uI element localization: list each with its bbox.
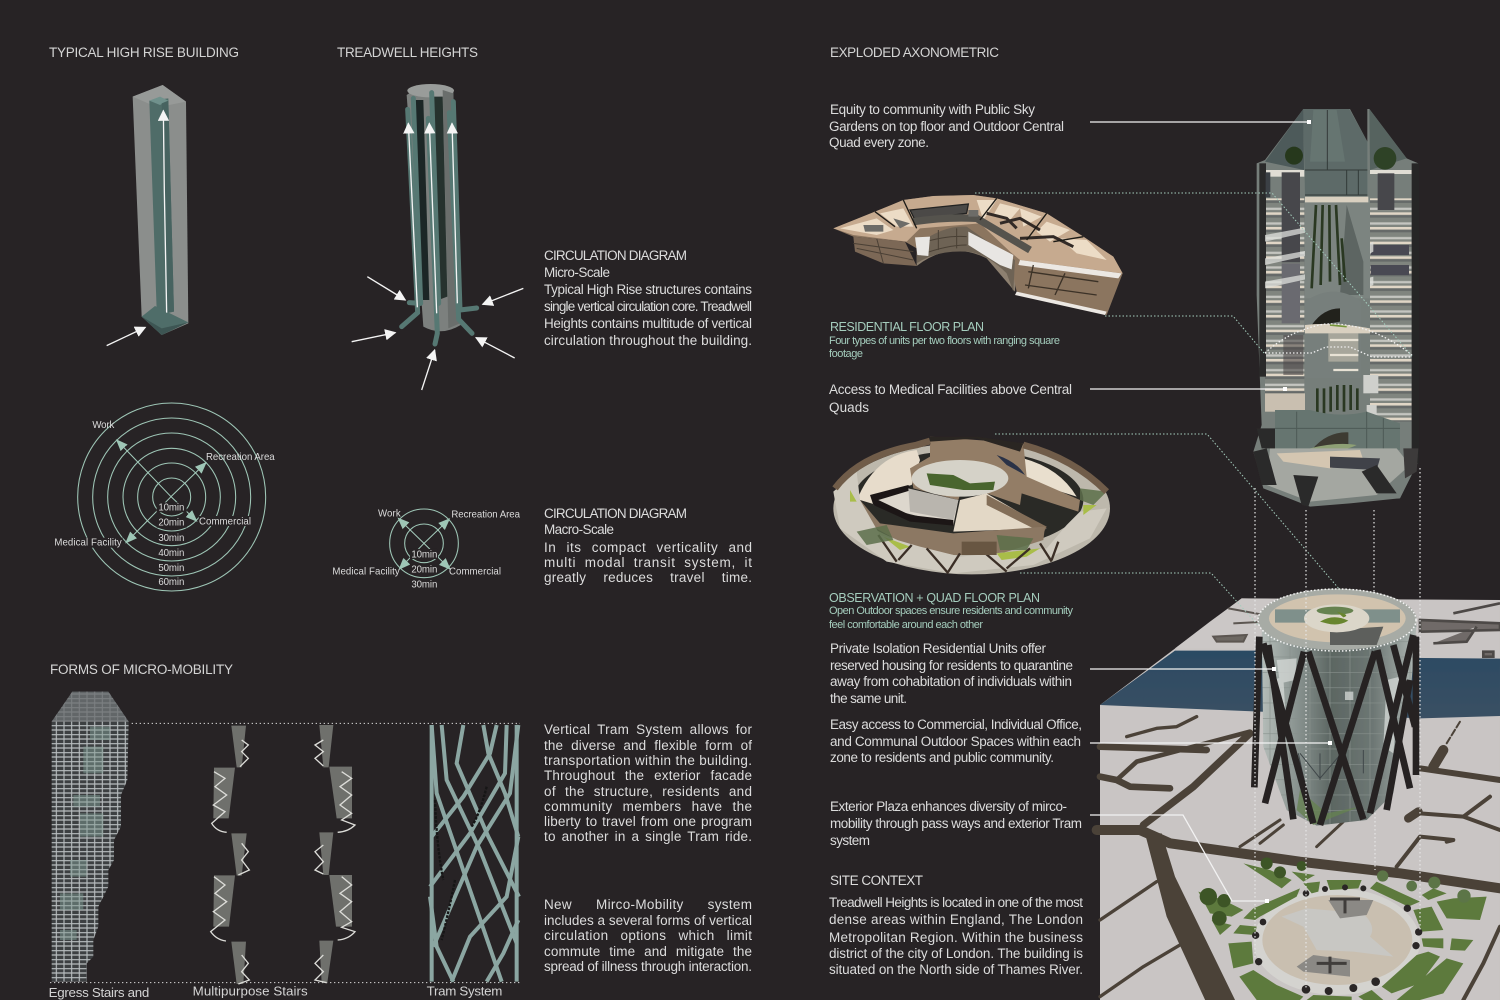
text: site context: situated on the North side of Thames River. — [829, 962, 1083, 977]
right residential floors — [1353, 163, 1419, 463]
roads — [1097, 717, 1500, 1000]
rings — [78, 403, 266, 591]
text block: vertical tram system: Throughout the exterior facade — [544, 768, 752, 783]
text: observation floor plan caption: OBSERVATION + QUAD FLOOR PLAN — [829, 591, 1040, 605]
atrium mid — [1305, 292, 1370, 378]
leader: exterior plaza — [1090, 815, 1269, 903]
labels: forms: Tram System — [427, 983, 502, 998]
text block: circulation micro-scale: single vertical circulation core. Treadwell — [544, 299, 752, 314]
left residential floors — [1259, 163, 1310, 412]
labels: 20min — [411, 564, 437, 575]
text block: vertical tram system: transportation within the building. — [544, 753, 752, 768]
stairs: multipurpose — [211, 725, 355, 984]
text: residential floor plan caption: footage — [829, 348, 863, 360]
text block: vertical tram system: of the structure, residents and — [544, 784, 752, 799]
text: residential floor plan caption: Four types of units per two floors with ranging square — [829, 335, 1060, 347]
text block: micro-mobility system: New Mirco-Mobility system — [544, 897, 752, 912]
text: public sky gardens: Quad every zone. — [829, 135, 929, 150]
time labels — [157, 502, 187, 588]
text: site context: dense areas within England, The London — [829, 912, 1083, 927]
destination labels: Commercial — [199, 516, 251, 527]
bollards — [1252, 884, 1422, 995]
vertical alignment guides — [1255, 468, 1420, 990]
arrows: entries — [352, 277, 523, 390]
destination labels: Work — [92, 420, 115, 431]
podium — [1253, 428, 1418, 507]
text: public sky gardens: Gardens on top floor and Outdoor Central — [829, 119, 1064, 134]
time labels: 10min — [158, 503, 184, 514]
dotted section outline: observation level — [1258, 589, 1416, 651]
text block: circulation micro-scale — [544, 248, 752, 348]
text block: circulation macro-scale: In its compact verticality and — [544, 540, 752, 555]
labels: Work — [378, 508, 401, 519]
text block: micro-mobility system: spread of illness through interaction. — [544, 959, 752, 974]
text: commercial spaces — [830, 717, 1082, 765]
rings — [390, 509, 458, 578]
trees — [1200, 857, 1471, 926]
text: observation floor plan caption: feel comfortable around each other — [829, 619, 983, 631]
time labels: 40min — [158, 548, 184, 559]
chart: small travel time rings — [332, 508, 521, 590]
text: exterior plaza — [830, 799, 1082, 848]
text: medical facilities: Access to Medical Facilities above Central — [829, 382, 1072, 397]
text: site context: Metropolitan Region. Within the business — [829, 930, 1083, 945]
labels — [332, 508, 521, 590]
text block: micro-mobility system: circulation options which limit — [544, 928, 752, 943]
destination labels: Medical Facility — [54, 538, 122, 549]
arrows: destinations — [398, 518, 450, 569]
text: medical facilities — [829, 382, 1072, 415]
chart: large travel time rings — [53, 403, 275, 591]
time labels: 50min — [158, 563, 184, 574]
text: exterior plaza: system — [830, 833, 870, 848]
time labels: 20min — [158, 518, 184, 529]
text: medical facilities: Quads — [829, 400, 869, 415]
labels: Commercial — [449, 567, 501, 578]
struts — [1254, 635, 1416, 825]
lower tower with diagrid struts — [1254, 589, 1417, 826]
text: public sky gardens: Equity to community with Public Sky — [830, 102, 1035, 117]
text block: circulation macro-scale: multi modal transit system, it — [544, 555, 752, 570]
text block: circulation macro-scale: CIRCULATION DIAGRAM — [544, 506, 687, 521]
roof glass — [1265, 109, 1407, 197]
floor plan: residential — [833, 195, 1123, 315]
arrow: vertical core — [163, 111, 167, 313]
text block: vertical tram system: the diverse and flexible form of — [544, 738, 752, 753]
text: site context: Treadwell Heights is located in one of the most — [829, 895, 1083, 910]
text block: circulation micro-scale: Micro-Scale — [544, 265, 610, 280]
river — [1100, 651, 1500, 718]
arrows: vertical circulation — [408, 123, 457, 313]
destination labels — [53, 420, 275, 549]
central green slats — [1305, 197, 1370, 418]
destination labels: Recreation Area — [206, 452, 275, 463]
labels: forms: Egress Stairs and — [49, 985, 149, 1000]
time labels: 60min — [158, 577, 184, 588]
upper tower exploded section — [1253, 109, 1419, 507]
text block: circulation macro-scale — [544, 506, 752, 585]
text: site context: SITE CONTEXT — [830, 873, 923, 888]
heading: forms of micro-mobility: FORMS OF MICRO-MOBILITY — [50, 662, 233, 677]
text: commercial spaces: and Communal Outdoor Spaces within each — [830, 734, 1081, 749]
text: site context: district of the city of London. The building is — [829, 946, 1083, 961]
text: exterior plaza: Exterior Plaza enhances diversity of mirco- — [830, 799, 1067, 814]
text: site context — [829, 873, 1083, 977]
labels: Recreation Area — [451, 510, 521, 521]
text: isolation units: away from cohabitation of individuals within — [830, 674, 1072, 689]
diagrams: micro-mobility forms — [49, 692, 520, 1000]
labels: 10min — [411, 549, 437, 560]
arrows: destinations — [117, 440, 206, 543]
leader: medical facilities — [1090, 387, 1287, 391]
leader: isolation units — [1090, 667, 1276, 671]
text block: vertical tram system — [544, 722, 752, 844]
labels: Medical Facility — [332, 567, 400, 578]
text: exterior plaza: mobility through pass ways and exterior Tram — [830, 816, 1082, 831]
text block: circulation macro-scale: Macro-Scale — [544, 522, 614, 537]
text: isolation units: the same unit. — [830, 691, 907, 706]
lattice: tram system — [430, 725, 519, 982]
text block: circulation micro-scale: circulation throughout the building. — [544, 333, 752, 348]
projection lines: residential floor plan — [975, 193, 1412, 356]
text block: circulation micro-scale: CIRCULATION DIAGRAM — [544, 248, 687, 263]
dotted guide: top — [132, 722, 520, 725]
diagram: treadwell heights cores — [352, 84, 523, 390]
text: commercial spaces: Easy access to Commercial, Individual Office, — [830, 717, 1082, 732]
text: observation floor plan caption — [829, 591, 1074, 631]
text block: circulation micro-scale: Typical High Rise structures contains — [544, 282, 752, 297]
dotted guide: bottom — [50, 981, 520, 984]
leader: public sky gardens — [1090, 120, 1311, 124]
text: isolation units — [830, 641, 1073, 706]
text: isolation units: reserved housing for residents to quarantine — [830, 658, 1073, 673]
dotted section outline: residential floor roof — [1265, 324, 1412, 355]
leader: commercial spaces — [1090, 741, 1332, 745]
plaza — [1198, 863, 1487, 1000]
text block: micro-mobility system: commute time and mitigate the — [544, 944, 752, 959]
text: isolation units: Private Isolation Residential Units offer — [830, 641, 1046, 656]
roof plaza — [1258, 589, 1417, 650]
text block: vertical tram system: community members have the — [544, 799, 752, 814]
text: public sky gardens — [829, 102, 1064, 150]
text block: circulation macro-scale: greatly reduces travel time. — [544, 570, 752, 585]
floor plan: observation and quad — [833, 437, 1110, 574]
labels: forms: Multipurpose Stairs — [193, 983, 308, 998]
labels: 30min — [411, 579, 437, 590]
dotted section outline: residential floor slab — [1265, 347, 1412, 357]
site context map — [1097, 598, 1500, 1000]
text: residential floor plan caption — [829, 320, 1060, 360]
time labels: 30min — [158, 533, 184, 544]
text block: micro-mobility system — [544, 897, 752, 974]
text block: micro-mobility system: includes a several forms of vertical — [544, 913, 752, 928]
wireframe: egress stairs and elevators — [52, 692, 129, 982]
text: commercial spaces: zone to residents and public community. — [830, 750, 1054, 765]
diagram: typical high rise core — [107, 85, 188, 346]
text block: vertical tram system: liberty to travel from one program — [544, 814, 752, 829]
projection lines: observation floor plan — [995, 434, 1340, 625]
labels: forms — [49, 983, 502, 1000]
text block: vertical tram system: to another in a single Tram ride. — [544, 829, 752, 844]
glass base lobby — [1275, 410, 1400, 452]
text: residential floor plan caption: RESIDENTIAL FLOOR PLAN — [830, 320, 984, 334]
text: observation floor plan caption: Open Outdoor spaces ensure residents and community — [829, 605, 1074, 617]
heading: exploded axonometric: EXPLODED AXONOMETRIC — [830, 45, 999, 60]
heading: treadwell heights: TREADWELL HEIGHTS — [337, 45, 478, 60]
heading: typical high rise building: TYPICAL HIGH RISE BUILDING — [49, 45, 239, 60]
text block: circulation micro-scale: Heights contains multitude of vertical — [544, 316, 752, 331]
text block: vertical tram system: Vertical Tram System allows for — [544, 722, 752, 737]
arrow: entry — [107, 327, 145, 346]
